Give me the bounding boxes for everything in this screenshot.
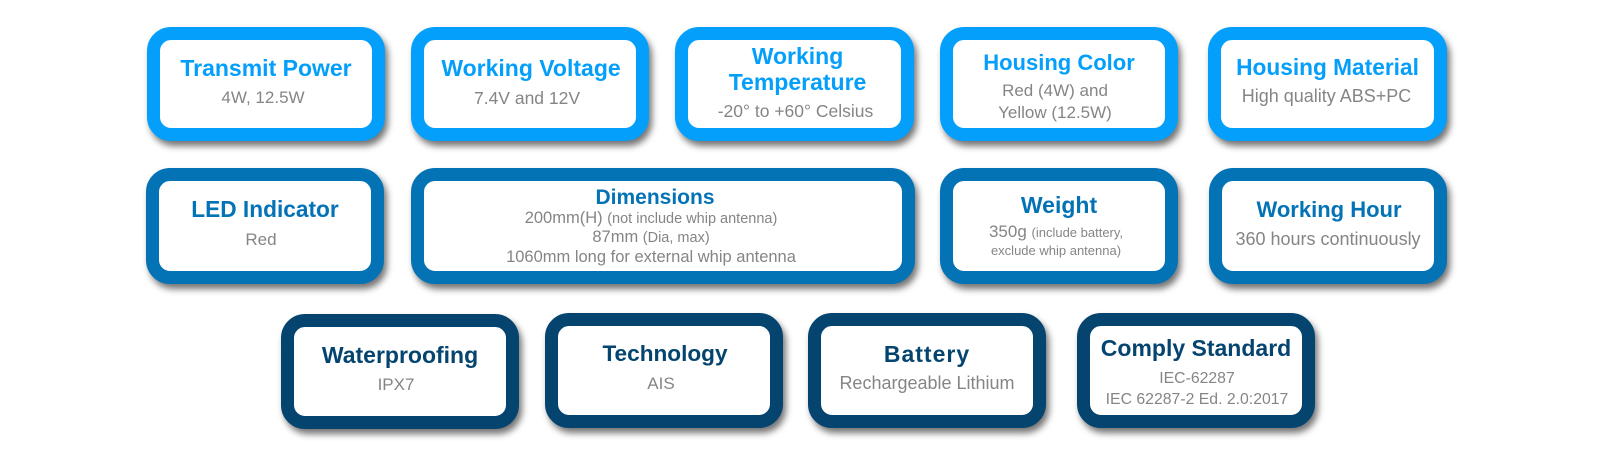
card: Housing Material bbox=[1208, 27, 1447, 141]
card: LED Indicator bbox=[146, 168, 384, 284]
heading: Working Hour: Working Hour bbox=[1256, 197, 1402, 222]
heading: Waterproofing: Waterproofing bbox=[322, 342, 478, 368]
card: Comply Standard bbox=[1077, 313, 1315, 428]
value: LED Indicator: Red bbox=[245, 230, 277, 249]
value: Dimensions: 87mm (Dia, max) bbox=[592, 228, 710, 246]
value: Weight: exclude whip antenna) bbox=[991, 242, 1121, 258]
value: Battery: Rechargeable Lithium bbox=[839, 373, 1015, 393]
heading: Transmit Power: Transmit Power bbox=[180, 55, 352, 81]
heading: Working Voltage: Working Voltage bbox=[441, 55, 621, 81]
value: Comply Standard bbox=[1106, 370, 1288, 408]
card: Technology bbox=[545, 313, 783, 428]
value: Working Hour: 360 hours continuously bbox=[1235, 229, 1421, 249]
value: Dimensions: 200mm(H) (not include whip antenna) bbox=[525, 209, 777, 227]
value: Weight: 350g (include battery, bbox=[989, 222, 1123, 241]
card: Dimensions bbox=[411, 168, 915, 284]
heading: Housing Color: Housing Color bbox=[983, 50, 1135, 75]
value: Comply Standard: IEC-62287 bbox=[1159, 370, 1235, 387]
heading: Comply Standard: Comply Standard bbox=[1101, 335, 1291, 361]
heading: Working Temperature bbox=[729, 43, 866, 95]
card: Waterproofing bbox=[281, 314, 519, 429]
value: Working Voltage: 7.4V and 12V bbox=[474, 88, 580, 108]
card: Working Temperature bbox=[675, 27, 914, 141]
value: Housing Color: Red (4W) and bbox=[1002, 81, 1108, 100]
heading: Weight: Weight bbox=[1021, 192, 1097, 218]
value: Weight bbox=[989, 222, 1123, 258]
value: Technology: AIS bbox=[647, 374, 675, 393]
card: Weight bbox=[940, 168, 1178, 284]
value: Dimensions bbox=[506, 209, 796, 266]
value: Housing Color bbox=[998, 81, 1112, 122]
card: Working Hour bbox=[1209, 168, 1447, 284]
heading: Dimensions: Dimensions bbox=[595, 186, 715, 209]
value: Dimensions: 1060mm long for external whip antenna bbox=[506, 248, 796, 266]
value: Housing Color: Yellow (12.5W) bbox=[998, 103, 1112, 122]
card: Housing Color bbox=[940, 27, 1178, 141]
heading: Battery: Battery bbox=[884, 341, 970, 367]
heading: Technology: Technology bbox=[602, 341, 728, 366]
value: Transmit Power: 4W, 12.5W bbox=[221, 88, 305, 107]
value: Waterproofing: IPX7 bbox=[378, 375, 414, 394]
value: Housing Material: High quality ABS+PC bbox=[1242, 86, 1411, 106]
card: Working Voltage bbox=[411, 27, 649, 141]
heading: Working Temperature: Working bbox=[752, 43, 843, 69]
value: Comply Standard: IEC 62287-2 Ed. 2.0:2017 bbox=[1106, 391, 1288, 408]
heading: Housing Material: Housing Material bbox=[1236, 54, 1419, 80]
card: Battery bbox=[808, 313, 1046, 428]
card: Transmit Power bbox=[147, 27, 385, 141]
heading: Working Temperature: Temperature bbox=[729, 69, 866, 95]
value: Working Temperature: -20° to +60° Celsius bbox=[718, 101, 873, 121]
heading: LED Indicator: LED Indicator bbox=[191, 196, 339, 222]
